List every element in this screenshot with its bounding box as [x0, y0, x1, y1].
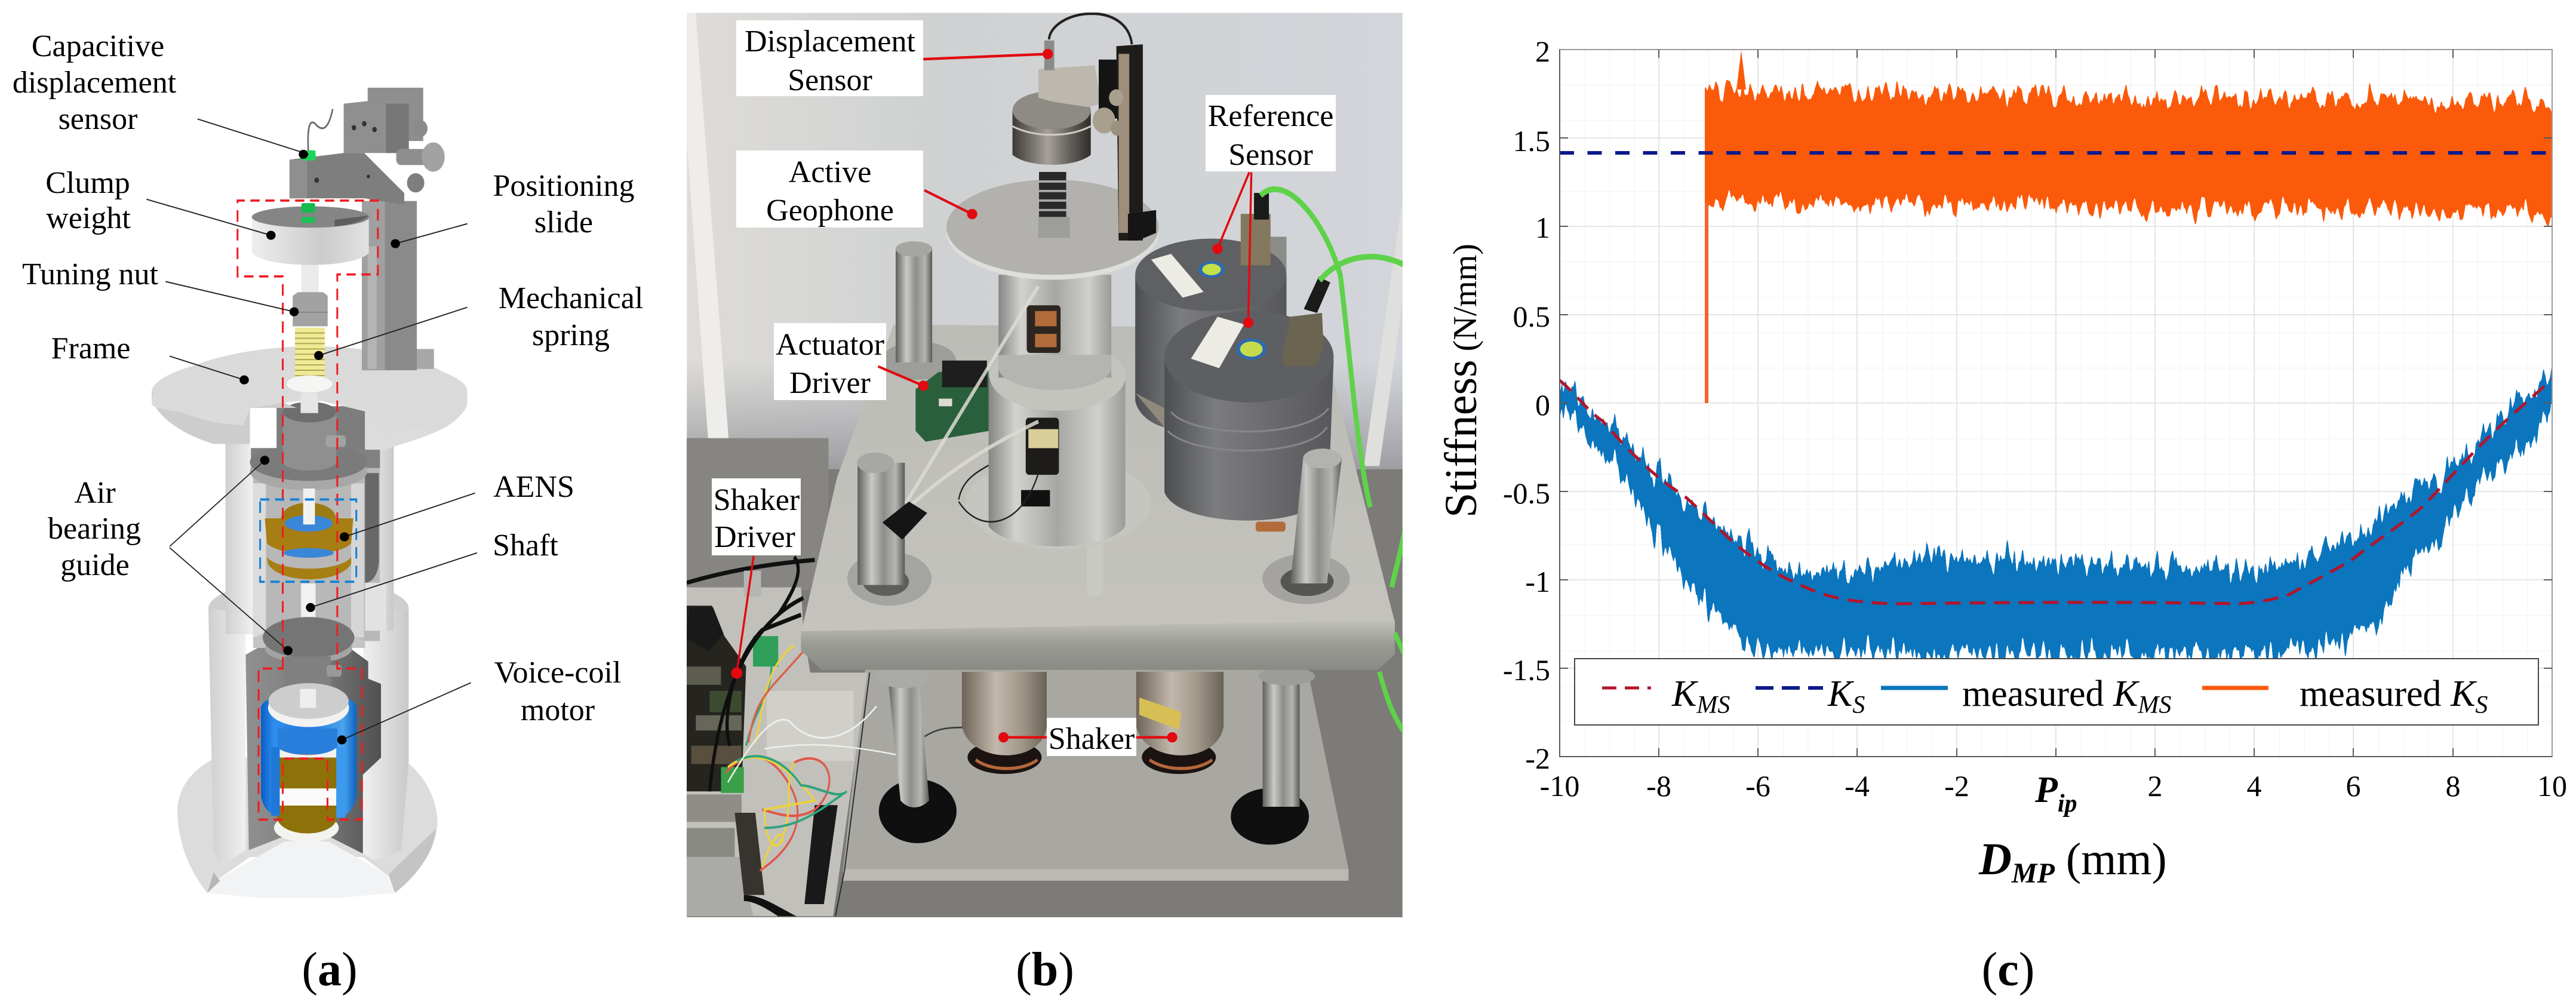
- AENS gold rings: [265, 503, 353, 579]
- shakers: [962, 672, 1224, 774]
- x tick labels: [1540, 769, 2567, 803]
- y axis title: Stiffness (N/mm): [1436, 244, 1486, 518]
- frame disk top: [152, 346, 467, 433]
- photo scene: [687, 13, 1410, 919]
- rear left rod: [882, 241, 956, 380]
- labels for panel a: Voice-coil: [494, 656, 621, 690]
- photo label text: [714, 24, 1333, 756]
- head block: [344, 88, 423, 153]
- right leg clamp: [1259, 667, 1315, 686]
- shaft: [301, 488, 315, 628]
- measured KS peak: [1736, 50, 1746, 90]
- sensor wire: [959, 465, 1039, 522]
- slide rail: [1093, 44, 1156, 241]
- base disk: [177, 758, 438, 898]
- leader lines: [146, 119, 477, 740]
- legend: S: [2475, 692, 2488, 719]
- panel c: stiffness chart: [1436, 35, 2567, 889]
- KMS dashed curve: [1560, 379, 2552, 604]
- axes frame: [1560, 50, 2552, 757]
- lower green cable: [1379, 633, 1405, 733]
- plot background and grid: [1560, 50, 2552, 757]
- plate top: [801, 325, 1395, 633]
- KS dashed line: [1560, 151, 2552, 155]
- caption a: (a): [302, 944, 358, 996]
- labels for panel a: AENS: [493, 470, 574, 504]
- small guide rod: [1087, 540, 1103, 597]
- terminal block: [744, 571, 761, 597]
- x tick labels: -2: [1944, 769, 1969, 803]
- photo label text: Sensor: [1228, 138, 1313, 172]
- caption b: (b): [1016, 944, 1074, 996]
- right leg base: [1231, 788, 1309, 845]
- labels for panel a: guide: [60, 548, 130, 582]
- optical breadboard: [687, 588, 868, 916]
- x tick labels: -6: [1745, 769, 1770, 803]
- backdrop: wall, floor and base plate: [687, 13, 1403, 919]
- front sensor: [1164, 276, 1333, 531]
- legend: S: [1852, 692, 1865, 719]
- base plate edge: [835, 672, 869, 916]
- voice-coil motor: [261, 683, 356, 842]
- caption c: (c): [1982, 944, 2034, 996]
- Pip marker label: ip: [2058, 790, 2077, 818]
- labels for panel a: Clump: [45, 166, 130, 200]
- geophone disk: [946, 180, 1159, 280]
- right leg: [1263, 672, 1300, 807]
- legend: K: [1672, 674, 1696, 714]
- lower housing body: [208, 579, 408, 867]
- y tick labels: -0.5: [1503, 477, 1550, 510]
- frame disk front edge: [152, 357, 468, 450]
- air tubing: [906, 286, 1038, 505]
- x tick labels: 4: [2246, 769, 2262, 803]
- black cables: [709, 557, 803, 791]
- y tick labels: [1503, 35, 1550, 775]
- y tick labels: 1.5: [1513, 124, 1550, 158]
- photo label text: Geophone: [766, 193, 894, 228]
- slide column: [362, 201, 434, 370]
- y tick labels: -1.5: [1503, 653, 1550, 687]
- x axis title: D: [1978, 834, 2012, 884]
- clump weight: [252, 207, 369, 265]
- upper housing: [225, 439, 394, 648]
- x tick labels: 6: [2346, 769, 2361, 803]
- measured KS start spike: [1705, 203, 1708, 403]
- black handle: [804, 805, 838, 904]
- black floor cable: [687, 560, 814, 583]
- legend: MS: [1696, 692, 1730, 719]
- coloured wires: [726, 645, 963, 871]
- spring: [1038, 172, 1070, 238]
- upper bearing flange: [250, 443, 380, 490]
- slide arm: [290, 153, 404, 205]
- whiteboard stand: [1364, 199, 1403, 466]
- labels for panel a: Mechanical: [499, 281, 643, 315]
- data series: [1560, 50, 2552, 654]
- panel a: actuator CAD cutaway: [13, 29, 643, 898]
- y tick labels: 0: [1535, 388, 1550, 422]
- legend: [1575, 659, 2538, 725]
- y tick labels: 1: [1535, 211, 1550, 244]
- floor tiles: [687, 438, 828, 591]
- heat sink: [687, 607, 723, 651]
- photo label text: Sensor: [788, 63, 872, 97]
- PCB actuator driver: [915, 361, 989, 442]
- x axis title: MP: [2011, 858, 2055, 889]
- labels for panel a: [13, 29, 643, 727]
- labels for panel a: Frame: [51, 331, 130, 365]
- power supplies: [687, 794, 797, 916]
- x tick labels: 10: [2537, 769, 2567, 803]
- labels for panel a: Shaft: [493, 528, 558, 563]
- labels for panel a: spring: [532, 318, 610, 352]
- driver boards: [687, 606, 778, 793]
- labels for panel a: Tuning nut: [22, 257, 158, 291]
- leg clamp: [888, 678, 916, 688]
- photo label text: Actuator: [776, 328, 884, 362]
- photo label text: Driver: [714, 520, 795, 554]
- plate side: [801, 620, 1395, 670]
- displacement sensor probe: [1044, 14, 1132, 70]
- labels for panel a: Capacitive: [32, 29, 164, 63]
- dashed outline: AENS: [260, 499, 356, 582]
- labels for panel a: displacement: [13, 66, 177, 100]
- photo label text: Reference: [1208, 99, 1333, 133]
- active mass: [1013, 65, 1101, 165]
- tuning nut and upper shaft: [293, 265, 328, 326]
- labels for panel a: bearing: [48, 512, 141, 546]
- x tick labels: -10: [1540, 769, 1579, 803]
- Pip marker label: P: [2035, 770, 2058, 810]
- measured KMS blue band: [1560, 373, 2552, 654]
- y tick labels: -2: [1525, 742, 1550, 775]
- capacitive sensor: [302, 109, 333, 223]
- central apparatus and sensors: [882, 14, 1410, 604]
- panel b: photograph of prototype: [687, 13, 1410, 919]
- photo label text: Shaker: [1049, 722, 1135, 756]
- leader dots: [239, 150, 400, 745]
- mechanical spring: [287, 328, 332, 410]
- bench and electronics: [687, 438, 963, 916]
- y tick labels: 2: [1535, 35, 1550, 68]
- legend: K: [1828, 674, 1852, 714]
- green cables: [1261, 189, 1410, 587]
- photo leader lines: [737, 54, 1252, 737]
- dashed outline: moving part: [238, 201, 378, 820]
- y tick labels: 0.5: [1513, 300, 1550, 333]
- tube connector: [883, 502, 927, 540]
- y tick labels: -1: [1525, 565, 1550, 598]
- front left rod: [847, 453, 932, 606]
- photo label text: Active: [789, 155, 871, 189]
- x axis title: (mm): [2055, 834, 2167, 884]
- photo labels: white boxes: [712, 20, 1336, 756]
- measured KS orange band: [1705, 91, 2552, 213]
- rear sensor: [1135, 193, 1286, 427]
- device lower section: [152, 357, 468, 898]
- x tick labels: 2: [2147, 769, 2163, 803]
- x tick labels: 8: [2446, 769, 2460, 803]
- labels for panel a: Air: [74, 476, 116, 510]
- positioning knobs: [396, 120, 445, 192]
- legend: measured K: [1962, 674, 2138, 714]
- central column: [966, 275, 1151, 549]
- legend: MS: [2137, 692, 2171, 719]
- front right rod: [1262, 448, 1350, 604]
- photo label text: Shaker: [714, 483, 800, 517]
- labels for panel a: slide: [534, 205, 593, 239]
- axis ticks: [1560, 50, 2552, 757]
- labels for panel a: sensor: [59, 102, 137, 136]
- photo label text: Driver: [789, 366, 871, 400]
- left leg under plate: [888, 679, 929, 807]
- labels for panel a: weight: [46, 201, 131, 235]
- photo label text: Displacement: [745, 24, 915, 59]
- legend: measured K: [2300, 674, 2475, 714]
- dashed outlines and leaders: [146, 119, 477, 820]
- bearing column: [276, 394, 365, 471]
- labels for panel a: motor: [521, 693, 595, 727]
- photo leader dots: [731, 49, 1253, 742]
- x tick labels: -8: [1646, 769, 1671, 803]
- lower bearing flange: [263, 617, 354, 687]
- plate base foot left: [879, 779, 957, 843]
- device upper section: [152, 88, 467, 433]
- labels for panel a: Positioning: [493, 169, 634, 203]
- lower housing interior: [245, 634, 381, 853]
- under-plate right parts: [801, 199, 1403, 845]
- x tick labels: -4: [1845, 769, 1870, 803]
